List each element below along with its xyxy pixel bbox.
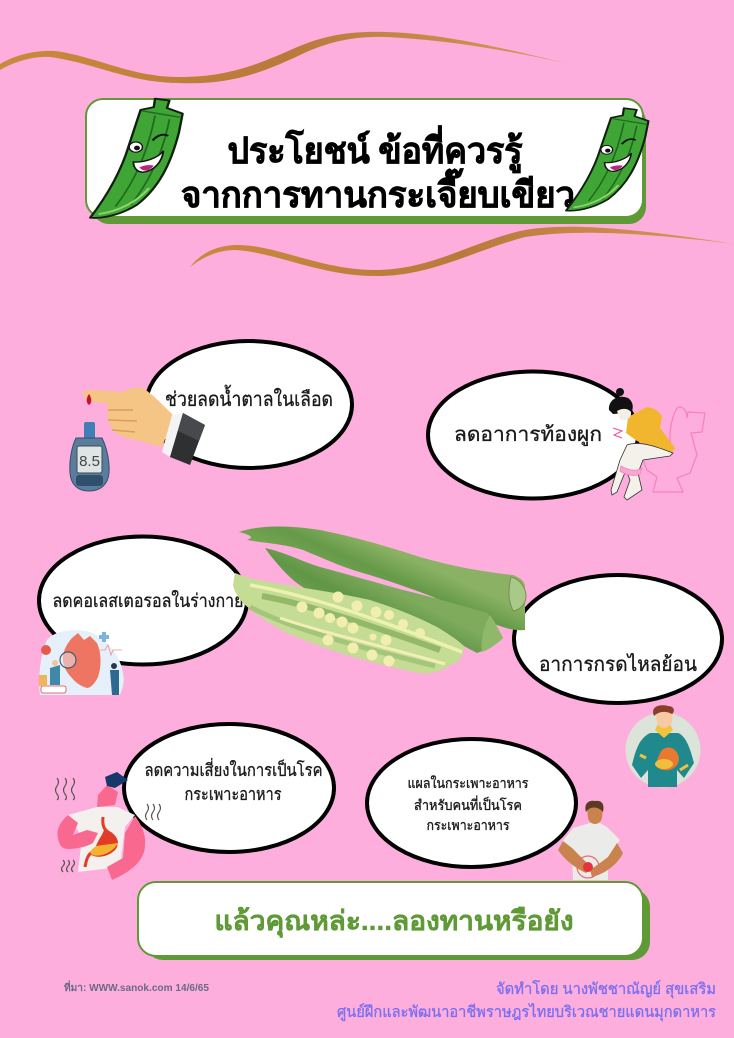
title card — [86, 99, 646, 224]
yellow shirt — [626, 407, 675, 455]
icon: person on toilet — [609, 388, 705, 500]
bottom gold ribbon — [190, 227, 734, 276]
icon: heart with doctors — [39, 630, 124, 695]
panel: reduce cholesterol — [39, 536, 247, 695]
icon: glucose meter — [70, 422, 109, 491]
icon: person with stomach ache — [56, 772, 160, 880]
credits: จัดทำโดย นางพัชชาณัญย์ สุขเสริม — [496, 980, 716, 999]
icon: glucose meter: 8.5 — [79, 453, 100, 470]
panel: acid reflux — [514, 575, 722, 703]
back okra pod — [239, 526, 525, 630]
cut open okra pod — [233, 573, 465, 673]
icon: okra mascot right — [566, 108, 648, 211]
underwear — [620, 466, 642, 475]
legs — [611, 443, 673, 500]
panel: stomach ulcers — [367, 739, 623, 880]
credits — [337, 980, 716, 1022]
icon: man with stomach pain — [558, 801, 623, 880]
icon: okra mascot left — [90, 99, 183, 218]
callout: have you tried it yet — [138, 882, 650, 960]
icon: pointing hand — [83, 388, 205, 465]
middle okra pod — [265, 548, 503, 653]
panel: reduce stomach disease risk: กระเพาะอาหาร — [184, 784, 282, 804]
source note: ที่มา: WWW.sanok.com 14/6/65 — [64, 980, 209, 994]
panel: reduce constipation: ลดอาการท้องผูก — [454, 424, 602, 447]
panel: reduce blood sugar: ช่วยลดน้ำตาลในเลือด — [165, 385, 333, 411]
panel: reduce stomach disease risk: ลดความเสี่ยงในการเป็นโรค — [144, 758, 322, 780]
panel: acid reflux: อาการกรดไหลย้อน — [539, 653, 697, 676]
panel: reduce cholesterol: ลดคอเลสเตอรอลในร่างกาย — [52, 590, 244, 611]
panel: reduce blood sugar — [70, 341, 352, 491]
panel: stomach ulcers: แผลในกระเพาะอาหาร — [408, 775, 529, 791]
panel: reduce stomach disease risk — [56, 724, 334, 880]
toilet — [643, 407, 705, 492]
top gold ribbon — [0, 32, 569, 83]
panel: reduce constipation — [428, 372, 705, 500]
panel: stomach ulcers: กระเพาะอาหาร — [426, 817, 510, 833]
credits: ศูนย์ฝึกและพัฒนาอาชีพราษฎรไทยบริเวณชายแดนมุกดาหาร — [337, 1003, 716, 1022]
icon: man with reflux — [626, 705, 700, 788]
title text: ประโยชน์ ข้อที่ควรรู้ — [228, 125, 523, 174]
callout: have you tried it yet: แล้วคุณหล่ะ....ลองทานหรือยัง — [214, 906, 574, 938]
title text: จากการทานกระเจี๊ยบเขียว — [181, 167, 575, 215]
okra photo — [233, 526, 526, 673]
title text — [181, 125, 575, 215]
panel: stomach ulcers: สำหรับคนที่เป็นโรค — [414, 796, 522, 813]
